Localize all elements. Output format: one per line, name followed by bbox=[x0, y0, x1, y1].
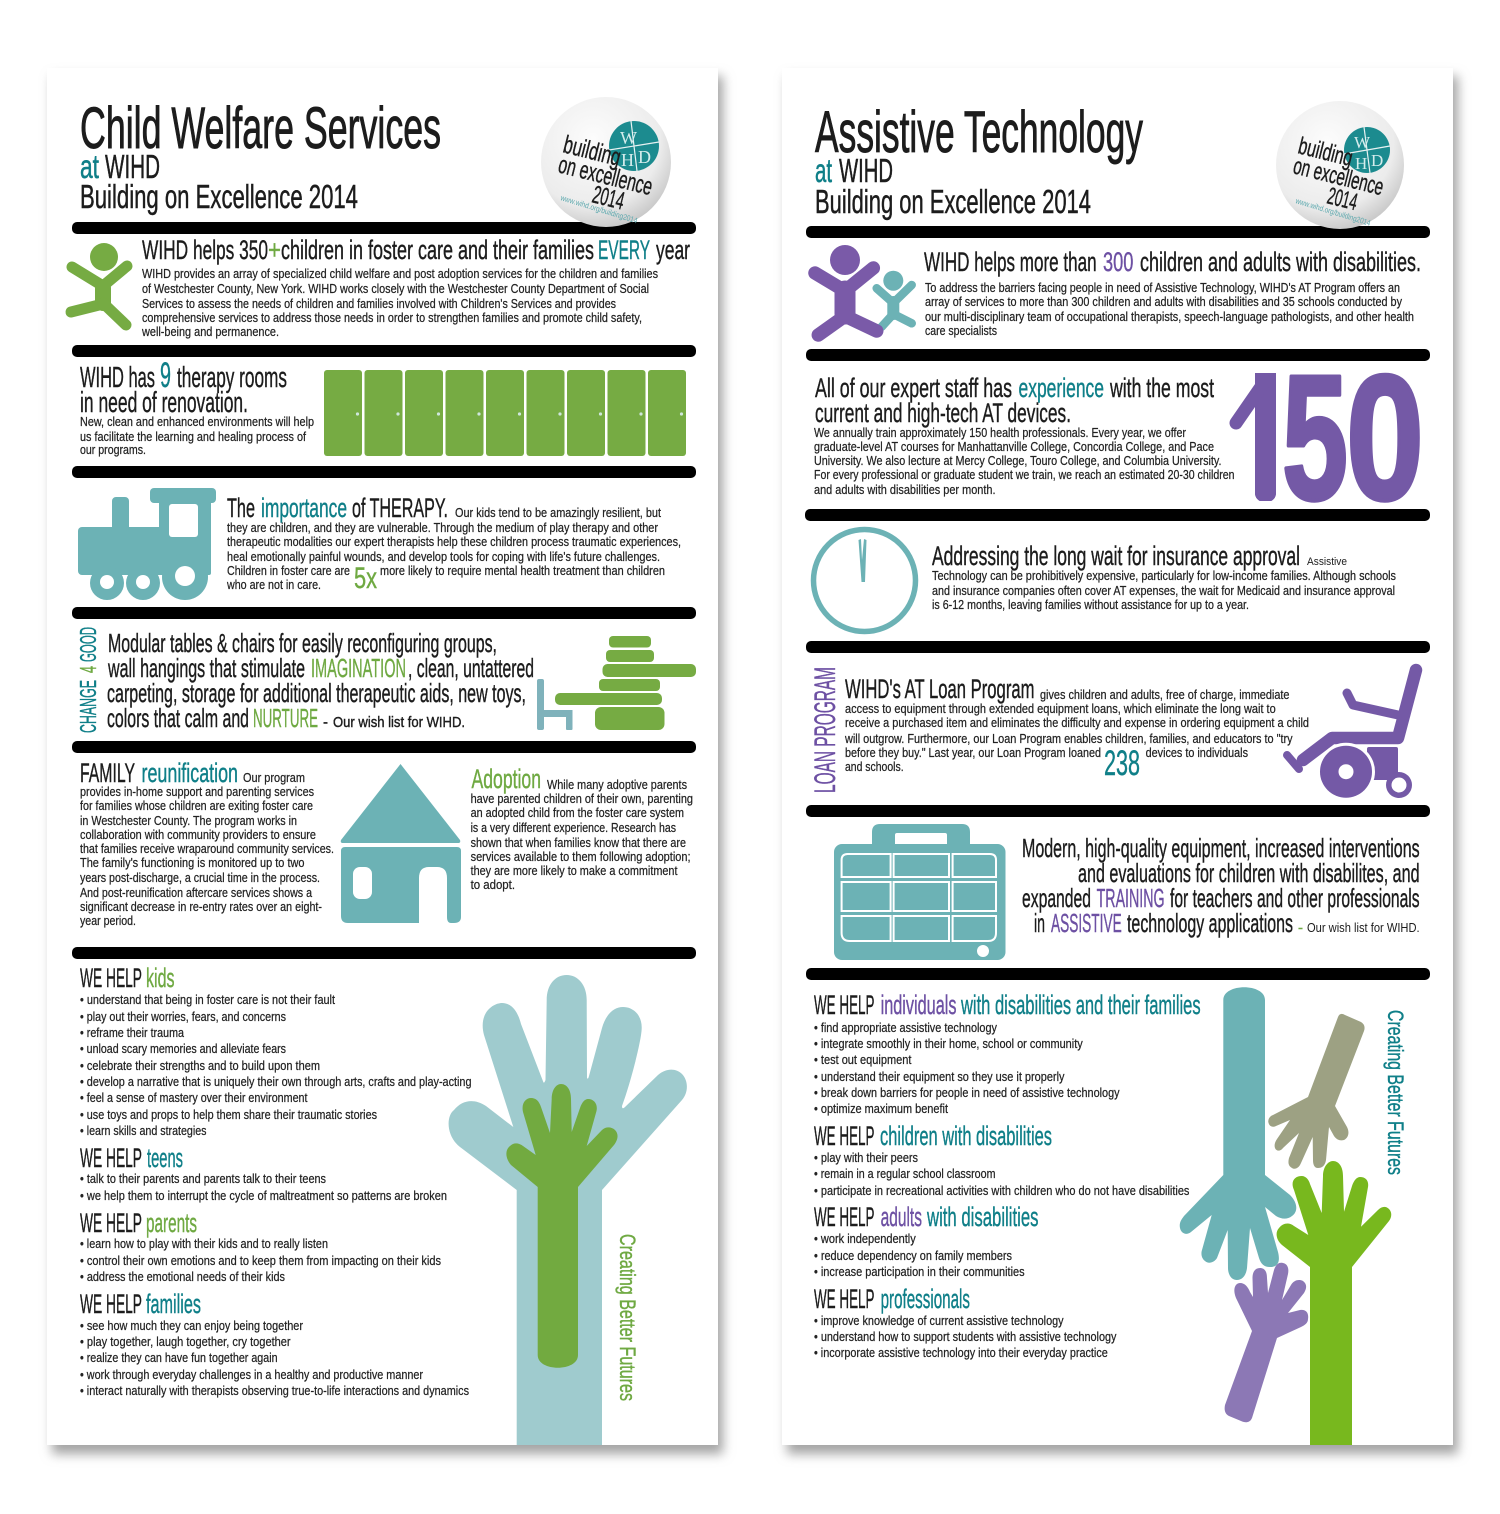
title: child welfare services: Building on Excellence 2014 bbox=[80, 178, 358, 215]
section: equipment wish list: technology applications bbox=[1127, 908, 1293, 938]
section: expert staff: graduate-level AT courses for Manhattanville College, Concordia College, and Pace bbox=[814, 440, 1214, 454]
section: foster care stat: comprehensive services to address those needs in order to strengthen families and promote child safety, bbox=[142, 311, 642, 325]
badge: building on excellence: www.wihd.org/building2014 bbox=[1294, 196, 1372, 228]
panel: child welfare services: GOOD bbox=[75, 627, 101, 662]
list: we help children: • remain in a regular school classroom bbox=[814, 1167, 996, 1181]
section: importance of therapy: therapeutic modalities our expert therapists help these children process traumatic experiences, bbox=[227, 535, 681, 549]
section: loan program bbox=[844, 674, 1309, 783]
list: we help children: WE HELP bbox=[814, 1121, 874, 1151]
section: equipment wish list: TRAINING bbox=[1097, 883, 1165, 913]
section: importance of therapy: heal emotionally painful wounds, and develop tools for coping with life's future challenges. bbox=[227, 550, 660, 564]
list: we help kids: • learn skills and strategies bbox=[80, 1124, 206, 1138]
list: we help adults bbox=[814, 1202, 1038, 1279]
list: we help families: • play together, laugh together, cry together bbox=[80, 1335, 291, 1349]
section: family reunification: that families receive wraparound community services. bbox=[80, 842, 334, 856]
section: insurance approval: Technology can be prohibitively expensive, particularly for low-income families. Although schools bbox=[932, 569, 1396, 583]
badge: building on excellence: W bbox=[620, 128, 637, 148]
section: therapy rooms text: our programs. bbox=[80, 443, 146, 457]
list: we help adults: WE HELP bbox=[814, 1202, 874, 1232]
list: we help families: • interact naturally with therapists observing true-to-life interactions and dynamics bbox=[80, 1384, 469, 1398]
section: 300 children and adults: To address the barriers facing people in need of Assistive Technology, WIHD's AT Program offers an bbox=[925, 281, 1400, 295]
section: therapy rooms text: in need of renovation. bbox=[80, 387, 248, 419]
section: equipment wish list: expanded bbox=[1022, 883, 1091, 913]
big number: 150: 1 bbox=[1236, 338, 1296, 537]
badge: building on excellence bbox=[1276, 101, 1404, 229]
section: therapy rooms text: WIHD has bbox=[80, 362, 155, 394]
section: importance of therapy bbox=[226, 493, 681, 595]
section: family reunification: year period. bbox=[80, 914, 136, 928]
icon: clock bbox=[814, 530, 916, 632]
section: adoption: have parented children of their own, parenting bbox=[471, 792, 693, 806]
icon: toy train bbox=[78, 488, 216, 600]
icon: wheelchair bbox=[1287, 670, 1416, 801]
title: assistive technology: at bbox=[815, 152, 832, 189]
section: expert staff: We annually train approximately 150 health professionals. Every year, we offer bbox=[814, 426, 1186, 440]
section: adoption bbox=[471, 764, 693, 892]
tagline: creating better futures: Creating Better Futures bbox=[615, 1234, 640, 1401]
list: we help parents: • learn how to play with their kids and to really listen bbox=[80, 1237, 328, 1251]
section: adoption: shown that when families know that there are bbox=[471, 836, 686, 850]
section: family reunification: for families whose children are exiting foster care bbox=[80, 799, 313, 813]
section: expert staff: and adults with disabilities per month. bbox=[814, 483, 996, 497]
title: child welfare services: WIHD bbox=[105, 148, 160, 185]
list: we help parents: • control their own emotions and to keep them from impacting on their kids bbox=[80, 1254, 441, 1268]
section: adoption: is a very different experience. Research has bbox=[471, 821, 676, 835]
section: 300 children and adults: array of services to more than 300 children and adults with disabilities and 35 schools conducted by bbox=[925, 295, 1403, 309]
icon: equipment case bbox=[834, 824, 1006, 960]
badge: building on excellence: building bbox=[561, 131, 624, 172]
list: we help kids: • unload scary memories and alleviate fears bbox=[80, 1042, 286, 1056]
list: we help kids bbox=[80, 963, 472, 1138]
big number: 150 bbox=[1230, 372, 1420, 503]
section: expert staff: experience bbox=[1018, 373, 1104, 403]
list: we help kids: • understand that being in foster care is not their fault bbox=[80, 993, 335, 1007]
section: 300 children and adults: our multi-disciplinary team of occupational therapists, speech-language pathologists, and other health bbox=[925, 310, 1414, 324]
section: importance of therapy: Children in foster care are bbox=[227, 564, 350, 578]
section: insurance approval: and insurance companies often cover AT expenses, the wait for Medicaid and insurance approval bbox=[932, 584, 1395, 598]
list: we help families bbox=[80, 1289, 469, 1398]
list: we help individuals: individuals bbox=[881, 990, 956, 1020]
section: therapy rooms text: therapy rooms bbox=[177, 362, 287, 394]
panel: child welfare services bbox=[47, 68, 723, 1454]
list: we help teens bbox=[80, 1143, 447, 1203]
list: we help families: families bbox=[146, 1289, 201, 1319]
section: importance of therapy: 5x bbox=[354, 562, 377, 595]
section: insurance approval bbox=[932, 541, 1396, 612]
section: adoption: an adopted child from the foster care system bbox=[471, 806, 684, 820]
list: we help kids: • reframe their trauma bbox=[80, 1026, 184, 1040]
badge: building on excellence: H bbox=[621, 150, 634, 170]
section: expert staff: with the most bbox=[1109, 373, 1214, 403]
list: we help professionals: • improve knowledge of current assistive technology bbox=[814, 1314, 1064, 1328]
section: loan program: 238 bbox=[1104, 744, 1140, 783]
list: we help professionals: WE HELP bbox=[814, 1284, 874, 1314]
section: family reunification: years post-discharge, a crucial time in the process. bbox=[80, 871, 320, 885]
section: family reunification: FAMILY bbox=[80, 758, 135, 788]
section: foster care stat: Services to assess the needs of children and families involved with Children's Services and provides bbox=[142, 297, 616, 311]
badge: building on excellence: 2014 bbox=[1325, 183, 1360, 216]
section: equipment wish list: in bbox=[1034, 908, 1045, 938]
list: we help professionals: • incorporate assistive technology into their everyday practice bbox=[814, 1346, 1108, 1360]
icon: tables and chair bbox=[537, 636, 696, 730]
section: loan program: receive a purchased item and eliminates the difficulty and expense in ordering equipment a child bbox=[845, 716, 1309, 730]
list: we help adults: with disabilities bbox=[926, 1202, 1038, 1232]
section: loan program: and schools. bbox=[845, 760, 904, 774]
section: wish list text: colors that calm and bbox=[107, 703, 249, 733]
badge: building on excellence: D bbox=[1371, 151, 1383, 170]
section: equipment wish list: Our wish list for WIHD. bbox=[1307, 921, 1420, 935]
section: adoption: they are more likely to make a commitment bbox=[471, 864, 678, 878]
title: child welfare services: Child Welfare Services bbox=[80, 96, 441, 161]
list: we help kids: kids bbox=[146, 963, 174, 993]
badge: building on excellence bbox=[541, 97, 671, 227]
list: we help parents bbox=[80, 1208, 441, 1284]
section: expert staff: current and high-tech AT devices. bbox=[815, 398, 1071, 428]
section: loan program: before they buy." Last year, our Loan Program loaned bbox=[845, 746, 1101, 760]
section: expert staff: All of our expert staff has bbox=[815, 373, 1012, 403]
list: we help kids: • celebrate their strengths and to build upon them bbox=[80, 1059, 320, 1073]
section: foster care stat bbox=[141, 235, 690, 339]
section: adoption: Adoption bbox=[472, 764, 541, 794]
section: wish list text: Modular tables & chairs for easily reconfiguring groups, bbox=[108, 628, 497, 658]
title: assistive technology: Building on Excellence 2014 bbox=[815, 183, 1091, 220]
big number: 150: 0 bbox=[1346, 338, 1424, 537]
section: importance of therapy: The bbox=[227, 493, 255, 523]
list: we help kids: • feel a sense of mastery over their environment bbox=[80, 1091, 308, 1105]
section: wish list text: IMAGINATION bbox=[311, 653, 406, 683]
list: we help parents: parents bbox=[146, 1208, 197, 1238]
section: family reunification: in Westchester County. The program works in bbox=[80, 814, 297, 828]
badge: building on excellence: on excellence bbox=[1291, 153, 1386, 201]
title: child welfare services bbox=[80, 96, 441, 215]
section: wish list text bbox=[107, 628, 534, 733]
list: we help adults: • reduce dependency on family members bbox=[814, 1249, 1012, 1263]
title: assistive technology: WIHD bbox=[839, 152, 893, 189]
section: family reunification: The family's functioning is monitored up to two bbox=[80, 856, 305, 870]
section: therapy rooms text: New, clean and enhanced environments will help bbox=[80, 415, 314, 429]
list: we help kids: • use toys and props to help them share their traumatic stories bbox=[80, 1108, 377, 1122]
section: wish list text: wall hangings that stimulate bbox=[107, 653, 305, 683]
section: equipment wish list bbox=[1022, 833, 1420, 938]
section: expert staff: For every professional or graduate student we train, we reach an estimated 20-30 children bbox=[814, 468, 1235, 482]
section: therapy rooms text: us facilitate the learning and healing process of bbox=[80, 430, 306, 444]
icon: four reaching hands bbox=[1180, 987, 1391, 1445]
section: foster care stat: WIHD helps 350 bbox=[142, 235, 268, 265]
section: therapy rooms text bbox=[80, 356, 314, 457]
section: loan program: will outgrow. Furthermore, our Loan Program enables children, families, and educators to "try bbox=[844, 732, 1293, 746]
badge: building on excellence: building bbox=[1296, 133, 1355, 172]
list: we help individuals: • test out equipment bbox=[814, 1053, 912, 1067]
section: importance of therapy: who are not in care. bbox=[226, 578, 321, 592]
section: equipment wish list: - bbox=[1298, 920, 1303, 935]
list: we help professionals: • understand how to support students with assistive technology bbox=[814, 1330, 1117, 1344]
section: importance of therapy: they are children, and they are vulnerable. Through the medium of play therapy and other bbox=[227, 521, 658, 535]
title: assistive technology: Assistive Technology bbox=[815, 100, 1143, 165]
icon: nine green doors bbox=[324, 370, 686, 456]
section: equipment wish list: ASSISTIVE bbox=[1051, 908, 1122, 938]
list: we help individuals: • optimize maximum benefit bbox=[814, 1102, 948, 1116]
panel: assistive technology bbox=[782, 68, 1458, 1454]
list: we help kids: • play out their worries, fears, and concerns bbox=[80, 1010, 286, 1024]
list: we help teens: • talk to their parents and parents talk to their teens bbox=[80, 1172, 326, 1186]
list: we help families: • see how much they can enjoy being together bbox=[80, 1319, 303, 1333]
list: we help individuals: • integrate smoothly in their home, school or community bbox=[814, 1037, 1083, 1051]
section: family reunification: Our program bbox=[243, 771, 305, 785]
list: we help individuals: • understand their equipment so they use it properly bbox=[814, 1070, 1065, 1084]
section: therapy rooms text: 9 bbox=[160, 356, 171, 395]
section: wish list text: NURTURE bbox=[253, 703, 318, 733]
section: foster care stat: children in foster care and their families bbox=[281, 235, 594, 265]
badge: building on excellence: H bbox=[1355, 154, 1367, 173]
icon: large and small hands bbox=[449, 975, 687, 1445]
label: loan program: LOAN PROGRAM bbox=[809, 667, 842, 793]
list: we help parents: • address the emotional needs of their kids bbox=[80, 1270, 285, 1284]
section: loan program: access to equipment through extended equipment loans, which eliminate the long wait to bbox=[845, 702, 1276, 716]
section: family reunification: reunification bbox=[142, 758, 238, 788]
list: we help adults: adults bbox=[881, 1202, 922, 1232]
section: adoption: to adopt. bbox=[471, 878, 515, 892]
section: foster care stat: well-being and permanence. bbox=[141, 325, 279, 339]
icon: adult and child figures bbox=[815, 245, 912, 335]
title: assistive technology bbox=[815, 100, 1143, 220]
badge: building on excellence: www.wihd.org/building2014 bbox=[559, 193, 639, 225]
badge: building on excellence: W bbox=[1354, 133, 1371, 152]
list: we help teens: WE HELP bbox=[80, 1143, 142, 1173]
badge: building on excellence: 2014 bbox=[590, 181, 627, 216]
list: we help individuals: WE HELP bbox=[814, 990, 874, 1020]
list: we help individuals: with disabilities and their families bbox=[960, 990, 1201, 1020]
label: change 4 good: CHANGE bbox=[75, 680, 101, 733]
section: 300 children and adults: 300 bbox=[1103, 247, 1133, 277]
section: expert staff bbox=[814, 373, 1235, 497]
list: we help families: • work through everyday challenges in a healthy and productive manner bbox=[80, 1368, 423, 1382]
section: wish list text: carpeting, storage for additional therapeutic aids, new toys, bbox=[107, 678, 526, 708]
list: we help adults: • increase participation in their communities bbox=[814, 1265, 1025, 1279]
icon: house bbox=[341, 764, 461, 923]
list: we help kids: WE HELP bbox=[80, 963, 142, 993]
section: insurance approval: Assistive bbox=[1307, 556, 1347, 568]
section: loan program: devices to individuals bbox=[1146, 746, 1248, 760]
label: change 4 good: 4 bbox=[75, 666, 101, 673]
section: adoption: services available to them following adoption; bbox=[471, 850, 690, 864]
section: loan program: WIHD's AT Loan Program bbox=[845, 674, 1034, 704]
section: 300 children and adults bbox=[924, 247, 1421, 338]
section: loan program: gives children and adults, free of charge, immediate bbox=[1040, 688, 1290, 702]
list: we help families: • realize they can have fun together again bbox=[80, 1351, 278, 1365]
section: family reunification: And post-reunification aftercare services shows a bbox=[80, 886, 312, 900]
list: we help adults: • work independently bbox=[814, 1232, 916, 1246]
list: we help individuals: • break down barriers for people in need of assistive technology bbox=[814, 1086, 1120, 1100]
section: adoption: While many adoptive parents bbox=[547, 778, 687, 792]
list: we help professionals: professionals bbox=[881, 1284, 970, 1314]
section: foster care stat: WIHD provides an array of specialized child welfare and post adoption services for the children and families bbox=[142, 267, 658, 281]
list: we help children bbox=[814, 1121, 1189, 1198]
list: we help parents: WE HELP bbox=[80, 1208, 142, 1238]
badge: building on excellence: D bbox=[638, 147, 651, 167]
list: we help individuals bbox=[814, 990, 1201, 1116]
list: we help children: children with disabilities bbox=[880, 1121, 1052, 1151]
section: family reunification: provides in-home support and parenting services bbox=[80, 785, 314, 799]
section: importance of therapy: of THERAPY. bbox=[352, 493, 448, 523]
badge: building on excellence: on excellence bbox=[556, 151, 655, 201]
list: we help families: WE HELP bbox=[80, 1289, 142, 1319]
big number: 150: 5 bbox=[1282, 338, 1348, 537]
section: 300 children and adults: care specialists bbox=[925, 324, 997, 338]
section: foster care stat: EVERY bbox=[598, 235, 650, 265]
section: importance of therapy: Our kids tend to be amazingly resilient, but bbox=[455, 506, 661, 520]
section: expert staff: University. We also lecture at Mercy College, Touro College, and Columbia University. bbox=[814, 454, 1222, 468]
icon: green jumping child bbox=[71, 243, 127, 325]
section: foster care stat: + bbox=[268, 235, 281, 265]
section: family reunification: significant decrease in re-entry rates over an eight- bbox=[80, 900, 322, 914]
list: we help professionals bbox=[814, 1284, 1117, 1360]
section: wish list text: Our wish list for WIHD. bbox=[333, 714, 465, 731]
tagline: creating better futures: Creating Better Futures bbox=[1383, 1010, 1408, 1175]
section: foster care stat: year bbox=[656, 235, 690, 265]
list: we help individuals: • find appropriate assistive technology bbox=[814, 1021, 998, 1035]
list: we help children: • participate in recreational activities with children who do not have disabilities bbox=[814, 1184, 1189, 1198]
section: importance of therapy: importance bbox=[261, 493, 347, 523]
section: family reunification bbox=[80, 758, 334, 928]
section: 300 children and adults: WIHD helps more than bbox=[924, 247, 1097, 277]
section: family reunification: collaboration with community providers to ensure bbox=[80, 828, 316, 842]
title: child welfare services: at bbox=[80, 148, 99, 185]
section: foster care stat: of Westchester County, New York. WIHD works closely with the Westchester County Department of Social bbox=[142, 282, 649, 296]
list: we help teens: • we help them to interrupt the cycle of maltreatment so patterns are broken bbox=[80, 1189, 447, 1203]
section: importance of therapy: more likely to require mental health treatment than children bbox=[380, 564, 665, 578]
section: wish list text: - bbox=[323, 714, 328, 731]
list: we help kids: • develop a narrative that is uniquely their own through arts, crafts and play-acting bbox=[80, 1075, 472, 1089]
section: insurance approval: Addressing the long wait for insurance approval bbox=[932, 541, 1300, 571]
list: we help children: • play with their peers bbox=[814, 1151, 918, 1165]
list: we help teens: teens bbox=[147, 1143, 183, 1173]
section: wish list text: , clean, untattered bbox=[408, 653, 534, 683]
section: insurance approval: is 6-12 months, leaving families without assistance for up to a year. bbox=[932, 598, 1249, 612]
